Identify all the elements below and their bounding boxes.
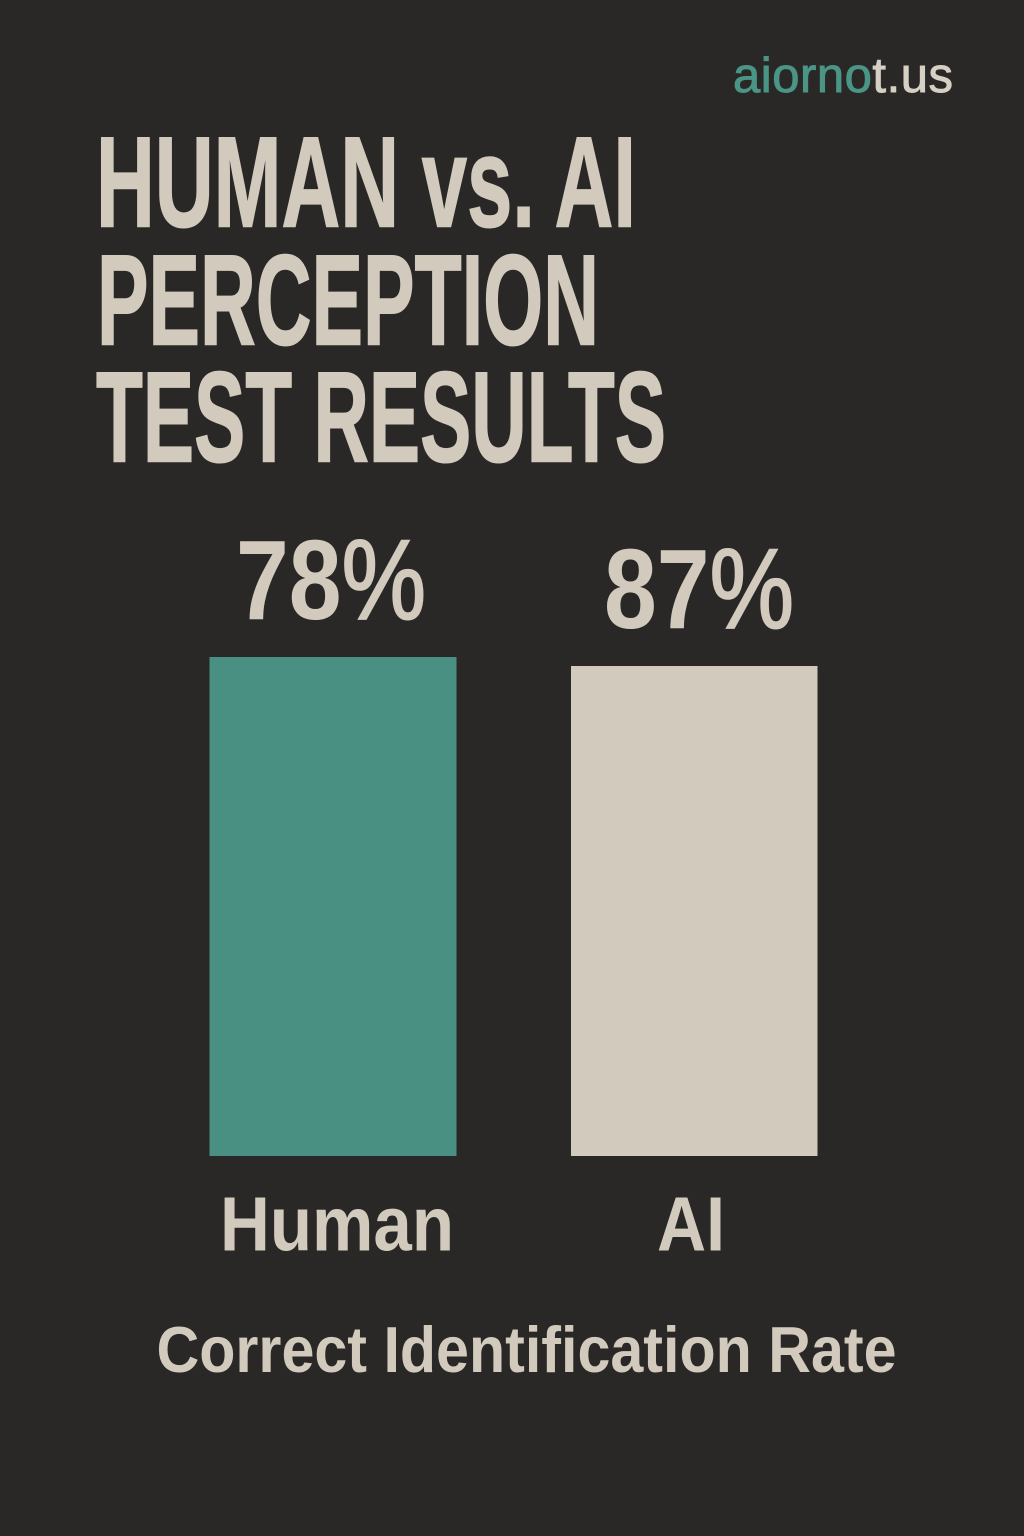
caption: Correct Identification Rate [156, 1313, 896, 1386]
label: Human: Human [220, 1182, 454, 1268]
title [96, 110, 666, 490]
title: HUMAN vs. AI [96, 110, 636, 254]
bar: AI [571, 666, 818, 1156]
label: AI: AI [657, 1182, 725, 1268]
value: Human 78%: 78% [236, 517, 426, 643]
value: AI 87%: 87% [604, 526, 794, 652]
title: PERCEPTION [97, 228, 599, 372]
bar: Human [210, 657, 456, 1156]
brand: aiornot.us: aiornot.us [733, 49, 953, 103]
